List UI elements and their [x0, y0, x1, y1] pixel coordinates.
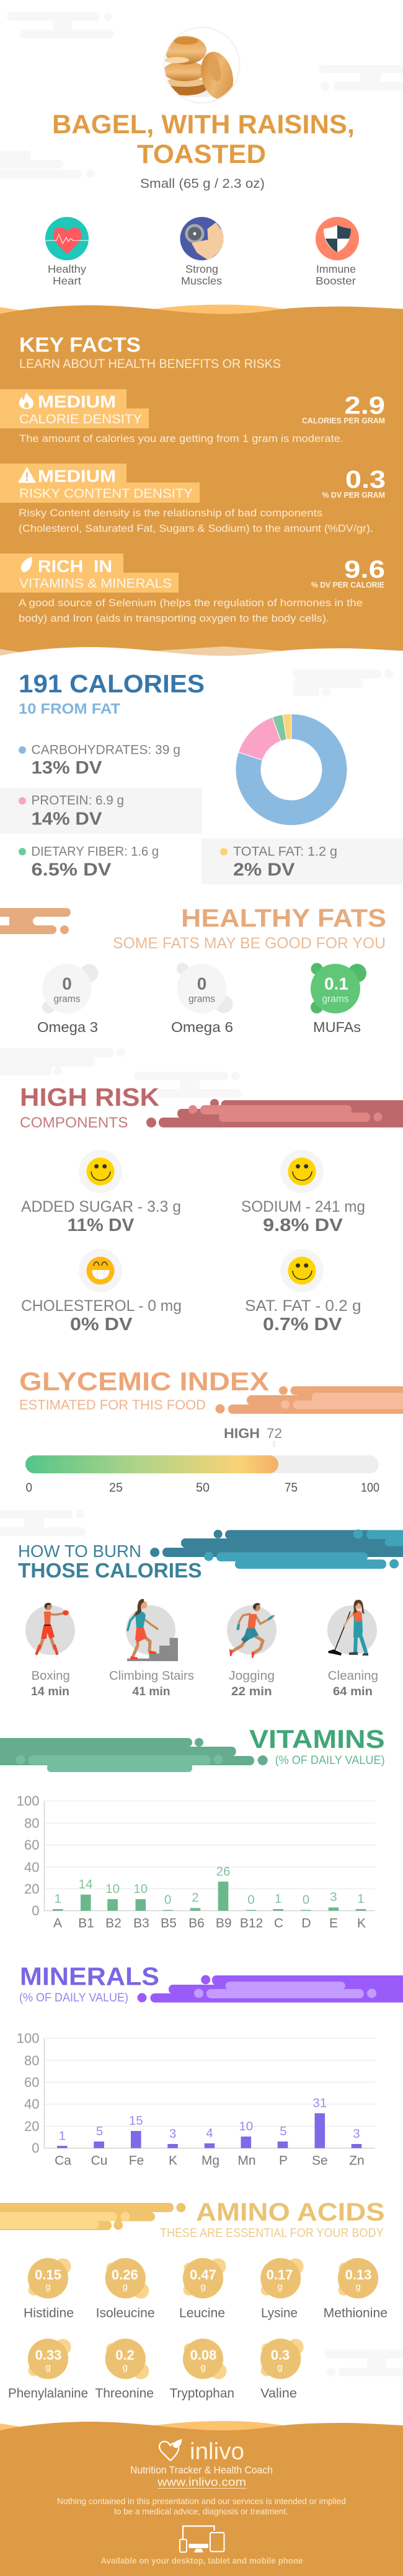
decorative header stripes [138, 1975, 403, 2003]
omega 3: grams [53, 994, 81, 1005]
title: TOASTED [137, 139, 266, 169]
phenylalanine: Phenylalanine [8, 2386, 88, 2401]
fact: rich in vitamins and minerals: 9.6 [344, 556, 385, 583]
minerals bar chart [17, 2031, 375, 2168]
fact: risky content density: Risky Content density is the relationship of bad components [19, 508, 322, 519]
minerals bar chart: 40 [24, 2096, 40, 2112]
fact: risky content density: RISKY CONTENT DENSITY [19, 486, 193, 501]
omega 6 [171, 963, 233, 1035]
decorative header stripes [150, 1530, 403, 1569]
fact: rich in vitamins and minerals: VITAMINS & MINERALS [19, 576, 172, 591]
lysine: g [277, 2282, 283, 2292]
heading: healthy fats: SOME FATS MAY BE GOOD FOR YOU [113, 935, 386, 952]
heading: healthy fats [113, 904, 386, 952]
vitamins bar chart: 100 [17, 1793, 40, 1809]
heading: calories [19, 669, 205, 718]
stat: dietary fiber [19, 845, 159, 880]
omega 3 [37, 964, 98, 1035]
vitamins bar chart: B1 [78, 1916, 94, 1930]
vitamins bar chart [17, 1793, 375, 1930]
fact: risky content density: MEDIUM [38, 466, 116, 486]
minerals bar chart: Mn [237, 2154, 256, 2168]
minerals bar chart: 15 [129, 2114, 143, 2128]
glycemic value [224, 1426, 282, 1447]
leucine [179, 2258, 226, 2320]
food photo: bagels [164, 27, 241, 104]
fact: calorie density [0, 389, 385, 444]
vitamins bar chart: 20 [24, 1881, 40, 1897]
vitamins bar chart: E [329, 1916, 338, 1930]
vitamins bar chart: B6 [188, 1916, 205, 1930]
heading: key facts: KEY FACTS [19, 333, 141, 356]
minerals bar chart: 60 [24, 2075, 40, 2090]
disclaimer: to be a medical advice, diagnosis or treatment. [114, 2507, 288, 2516]
fact: risky content density: % DV PER GRAM [322, 491, 385, 500]
panel: high risk components [20, 1083, 403, 1334]
heading: amino acids [160, 2197, 385, 2240]
isoleucine: 0.26 [112, 2267, 138, 2282]
vitamins bar chart: 0 [32, 1903, 40, 1918]
added sugar: ADDED SUGAR - 3.3 g [21, 1198, 181, 1215]
vitamins bar chart: 0 [164, 1893, 171, 1907]
phenylalanine: g [45, 2362, 51, 2373]
stat: carbohydrates: 13% DV [31, 758, 102, 778]
activity: climbing stairs: Climbing Stairs [109, 1669, 194, 1683]
vitamins bar chart: 60 [24, 1837, 40, 1853]
vitamins bar chart: K [357, 1916, 366, 1930]
activity: jogging: 22 min [231, 1685, 272, 1698]
availability note: Available on your desktop, tablet and mobile phone [100, 2556, 303, 2565]
disclaimer: Nothing contained in this presentation and our services is intended or implied [57, 2496, 346, 2506]
tagline and url: Nutrition Tracker & Health Coach [130, 2464, 273, 2476]
heading: key facts: LEARN ABOUT HEALTH BENEFITS OR RISKS [19, 357, 281, 371]
tagline and url [130, 2464, 273, 2489]
minerals bar chart: 10 [239, 2119, 253, 2133]
histidine [24, 2258, 74, 2320]
minerals bar chart: 5 [96, 2124, 103, 2138]
vitamins bar chart: 26 [216, 1864, 230, 1879]
minerals bar chart: 4 [206, 2126, 213, 2140]
mufas: MUFAs [313, 1019, 361, 1035]
footer [0, 2421, 403, 2576]
activity: climbing stairs [109, 1599, 194, 1698]
sodium [241, 1150, 365, 1235]
lysine [260, 2258, 304, 2320]
valine [260, 2339, 304, 2401]
minerals bar chart: Mg [202, 2154, 219, 2168]
benefit: healthy heart: Heart [53, 275, 81, 287]
activity: cleaning: Cleaning [328, 1669, 378, 1683]
vitamins bar chart: 10 [105, 1882, 120, 1896]
heading: healthy fats: HEALTHY FATS [181, 904, 386, 932]
tryptophan: g [200, 2362, 206, 2373]
icon: devices [180, 2526, 224, 2552]
heading: burn calories: HOW TO BURN [18, 1542, 141, 1561]
heading: minerals [19, 1962, 159, 2005]
minerals bar chart: Zn [349, 2154, 365, 2168]
mufas: 0.1 [324, 974, 348, 994]
vitamins bar chart: C [274, 1916, 283, 1930]
vitamins bar chart: 2 [192, 1890, 199, 1905]
minerals bar chart: 3 [169, 2127, 176, 2141]
fact: calorie density: CALORIES PER GRAM [302, 417, 385, 425]
fact: risky content density: 0.3 [345, 466, 386, 493]
activity: boxing: 14 min [31, 1685, 69, 1698]
vitamins bar chart: B9 [216, 1916, 232, 1930]
logo: inlivo [159, 2438, 244, 2464]
panel: amino acids [0, 2197, 388, 2401]
heading: high risk: HIGH RISK [20, 1083, 159, 1111]
glycemic gauge: 75 [285, 1481, 298, 1494]
saturated fat: 0.7% DV [263, 1315, 342, 1334]
heading: minerals: MINERALS [20, 1962, 159, 1991]
fact: risky content density [0, 464, 386, 534]
heading: high risk [20, 1083, 159, 1131]
methionine [324, 2258, 388, 2320]
decorative header stripes [0, 2203, 186, 2230]
vitamins bar chart: B3 [133, 1916, 149, 1930]
mufas [311, 963, 366, 1035]
fact: rich in vitamins and minerals: body) and Iron (aids in transporting oxygen to the body cells). [19, 613, 329, 624]
benefit: healthy heart: Healthy [48, 263, 86, 275]
heading: burn calories: THOSE CALORIES [18, 1559, 202, 1582]
glycemic gauge: 25 [109, 1481, 123, 1494]
leucine: g [200, 2282, 206, 2292]
isoleucine: Isoleucine [96, 2306, 155, 2320]
mufas: grams [322, 994, 349, 1005]
omega 6: Omega 6 [171, 1019, 233, 1035]
activity: cleaning: 64 min [333, 1685, 373, 1698]
heading: key facts [19, 333, 281, 371]
panel: how to burn those calories [18, 1530, 403, 1698]
omega 3: Omega 3 [37, 1019, 98, 1035]
decorative header stripes [146, 1099, 403, 1127]
activity: boxing [25, 1603, 75, 1698]
minerals bar chart: 1 [59, 2129, 66, 2143]
stat: dietary fiber: DIETARY FIBER: 1.6 g [31, 845, 159, 859]
stat: carbohydrates: CARBOHYDRATES: 39 g [31, 743, 180, 757]
vitamins bar chart: 1 [275, 1892, 281, 1906]
fact: calorie density: CALORIE DENSITY [19, 412, 142, 426]
minerals bar chart: 5 [280, 2124, 287, 2138]
valine: 0.3 [271, 2347, 290, 2363]
vitamins bar chart: 1 [357, 1892, 365, 1906]
valine: Valine [260, 2386, 297, 2401]
benefit: healthy heart [45, 217, 89, 287]
panel: calories [0, 669, 403, 884]
fact: calorie density: 2.9 [345, 392, 385, 419]
macronutrient donut chart [236, 714, 347, 826]
vitamins bar chart: 14 [79, 1877, 92, 1892]
sodium: SODIUM - 241 mg [241, 1198, 365, 1215]
panel: key facts [0, 305, 403, 666]
heading: burn calories [18, 1542, 202, 1582]
threonine: Threonine [95, 2386, 154, 2401]
saturated fat [245, 1249, 361, 1334]
threonine: g [123, 2362, 128, 2373]
heading: high risk: COMPONENTS [20, 1114, 128, 1131]
minerals bar chart: 20 [24, 2119, 40, 2134]
panel: vitamins [0, 1724, 385, 1930]
histidine: g [45, 2282, 51, 2292]
fact: risky content density: (Cholesterol, Saturated Fat, Sugars & Sodium) to the amount (%DV/gr). [19, 523, 373, 534]
stat: total fat: TOTAL FAT: 1.2 g [233, 845, 337, 859]
omega 6: grams [188, 994, 215, 1005]
methionine: g [355, 2282, 361, 2292]
vitamins bar chart: B5 [161, 1916, 177, 1930]
saturated fat: SAT. FAT - 0.2 g [245, 1297, 361, 1315]
cholesterol: 0% DV [70, 1315, 133, 1334]
valine: g [277, 2362, 283, 2373]
isoleucine [96, 2258, 155, 2320]
decorative header stripes [0, 1738, 268, 1772]
added sugar: 11% DV [68, 1215, 134, 1235]
cholesterol [21, 1249, 182, 1334]
stat: protein: 14% DV [31, 809, 102, 829]
heading: vitamins: (% OF DAILY VALUE) [275, 1753, 385, 1767]
panel: minerals [17, 1962, 403, 2168]
vitamins bar chart: B12 [240, 1916, 263, 1930]
stat: carbohydrates [19, 743, 180, 778]
tryptophan: 0.08 [190, 2347, 216, 2363]
vitamins bar chart: B2 [105, 1916, 122, 1930]
panel: glycemic index [19, 1367, 403, 1494]
lysine: Lysine [261, 2306, 298, 2320]
vitamins bar chart: 40 [24, 1859, 40, 1875]
activity: cleaning [327, 1600, 378, 1698]
stat: protein [0, 788, 202, 834]
logo: inlivo: inlivo [190, 2438, 244, 2464]
cholesterol: CHOLESTEROL - 0 mg [21, 1297, 182, 1315]
phenylalanine [8, 2339, 88, 2401]
vitamins bar chart: 3 [330, 1890, 337, 1904]
minerals bar chart: P [279, 2154, 288, 2168]
glycemic gauge: 100 [361, 1481, 379, 1494]
histidine: Histidine [24, 2306, 74, 2320]
omega 3: 0 [62, 974, 72, 994]
heading: calories: 191 CALORIES [19, 669, 205, 698]
fact: rich in vitamins and minerals: A good source of Selenium (helps the regulation of hormones in the [19, 598, 363, 609]
vitamins bar chart: 10 [133, 1882, 148, 1896]
vitamins bar chart: 80 [24, 1815, 40, 1831]
benefit: immune booster: Immune [316, 263, 356, 275]
isoleucine: g [123, 2282, 128, 2292]
activity: boxing: Boxing [32, 1669, 70, 1683]
benefit: immune booster: Booster [316, 275, 356, 287]
benefit: strong muscles [180, 217, 224, 287]
leucine: Leucine [179, 2306, 225, 2320]
heading: amino acids: AMINO ACIDS [196, 2197, 385, 2226]
histidine: 0.15 [35, 2267, 61, 2282]
minerals bar chart: 3 [353, 2127, 360, 2141]
vitamins bar chart: 0 [247, 1893, 255, 1907]
benefit: immune booster [316, 217, 359, 287]
methionine: Methionine [324, 2306, 388, 2320]
activity: jogging [227, 1603, 277, 1698]
heading: minerals: (% OF DAILY VALUE) [19, 1991, 128, 2005]
benefit: strong muscles: Muscles [181, 275, 222, 287]
omega 6: 0 [197, 974, 206, 994]
minerals bar chart: 31 [312, 2096, 327, 2110]
threonine: 0.2 [115, 2347, 135, 2363]
heading: glycemic index: GLYCEMIC INDEX [19, 1367, 269, 1396]
vitamins bar chart: 1 [55, 1892, 61, 1906]
glycemic value: 72 [267, 1426, 282, 1441]
minerals bar chart: Fe [129, 2154, 144, 2168]
benefit: strong muscles: Strong [185, 263, 218, 275]
phenylalanine: 0.33 [35, 2347, 61, 2363]
tagline and url: www.inlivo.com [157, 2476, 246, 2489]
heading: calories: 10 FROM FAT [19, 701, 120, 718]
vitamins bar chart: A [53, 1916, 62, 1930]
minerals bar chart: 80 [24, 2053, 40, 2068]
threonine [95, 2339, 154, 2401]
glycemic value: HIGH [224, 1426, 260, 1441]
stat: total fat [202, 839, 403, 884]
vitamins bar chart: D [301, 1916, 311, 1930]
minerals bar chart: Ca [55, 2154, 71, 2168]
fact: rich in vitamins and minerals: % DV PER CALORIE [311, 581, 384, 589]
methionine: 0.13 [345, 2267, 371, 2282]
glycemic gauge [25, 1455, 379, 1494]
fact: calorie density: MEDIUM [38, 392, 116, 412]
minerals bar chart: Se [312, 2154, 328, 2168]
heading: vitamins: VITAMINS [249, 1724, 385, 1753]
fact: rich in vitamins and minerals: RICH IN [38, 557, 112, 576]
heading: vitamins [249, 1724, 385, 1767]
title [52, 110, 355, 169]
minerals bar chart: K [169, 2154, 177, 2168]
fact: rich in vitamins and minerals [0, 554, 385, 624]
tryptophan: Tryptophan [170, 2386, 234, 2401]
sodium: 9.8% DV [263, 1215, 343, 1235]
minerals bar chart: 0 [32, 2140, 40, 2156]
stat: total fat: 2% DV [233, 860, 295, 880]
title: BAGEL, WITH RAISINS, [52, 110, 355, 139]
stat: protein: PROTEIN: 6.9 g [31, 793, 124, 808]
tryptophan [170, 2339, 234, 2401]
leucine: 0.47 [190, 2267, 216, 2282]
stat: dietary fiber: 6.5% DV [31, 860, 112, 880]
heading: glycemic index: ESTIMATED FOR THIS FOOD [19, 1397, 206, 1413]
disclaimer [57, 2496, 346, 2516]
heading: glycemic index [19, 1367, 269, 1413]
lysine: 0.17 [267, 2267, 293, 2282]
decorative header stripes [216, 1386, 403, 1414]
added sugar [21, 1150, 181, 1235]
vitamins bar chart: 0 [303, 1893, 309, 1907]
serving size: Small (65 g / 2.3 oz) [140, 177, 265, 191]
minerals bar chart: 100 [17, 2031, 40, 2046]
glycemic gauge: 50 [196, 1481, 210, 1494]
minerals bar chart: Cu [91, 2154, 107, 2168]
decorative header stripes [0, 908, 71, 934]
activity: jogging: Jogging [229, 1669, 275, 1683]
activity: climbing stairs: 41 min [133, 1685, 170, 1698]
panel: healthy fats [0, 904, 386, 1035]
fact: calorie density: The amount of calories you are getting from 1 gram is moderate. [19, 433, 343, 444]
glycemic gauge: 0 [26, 1481, 32, 1494]
